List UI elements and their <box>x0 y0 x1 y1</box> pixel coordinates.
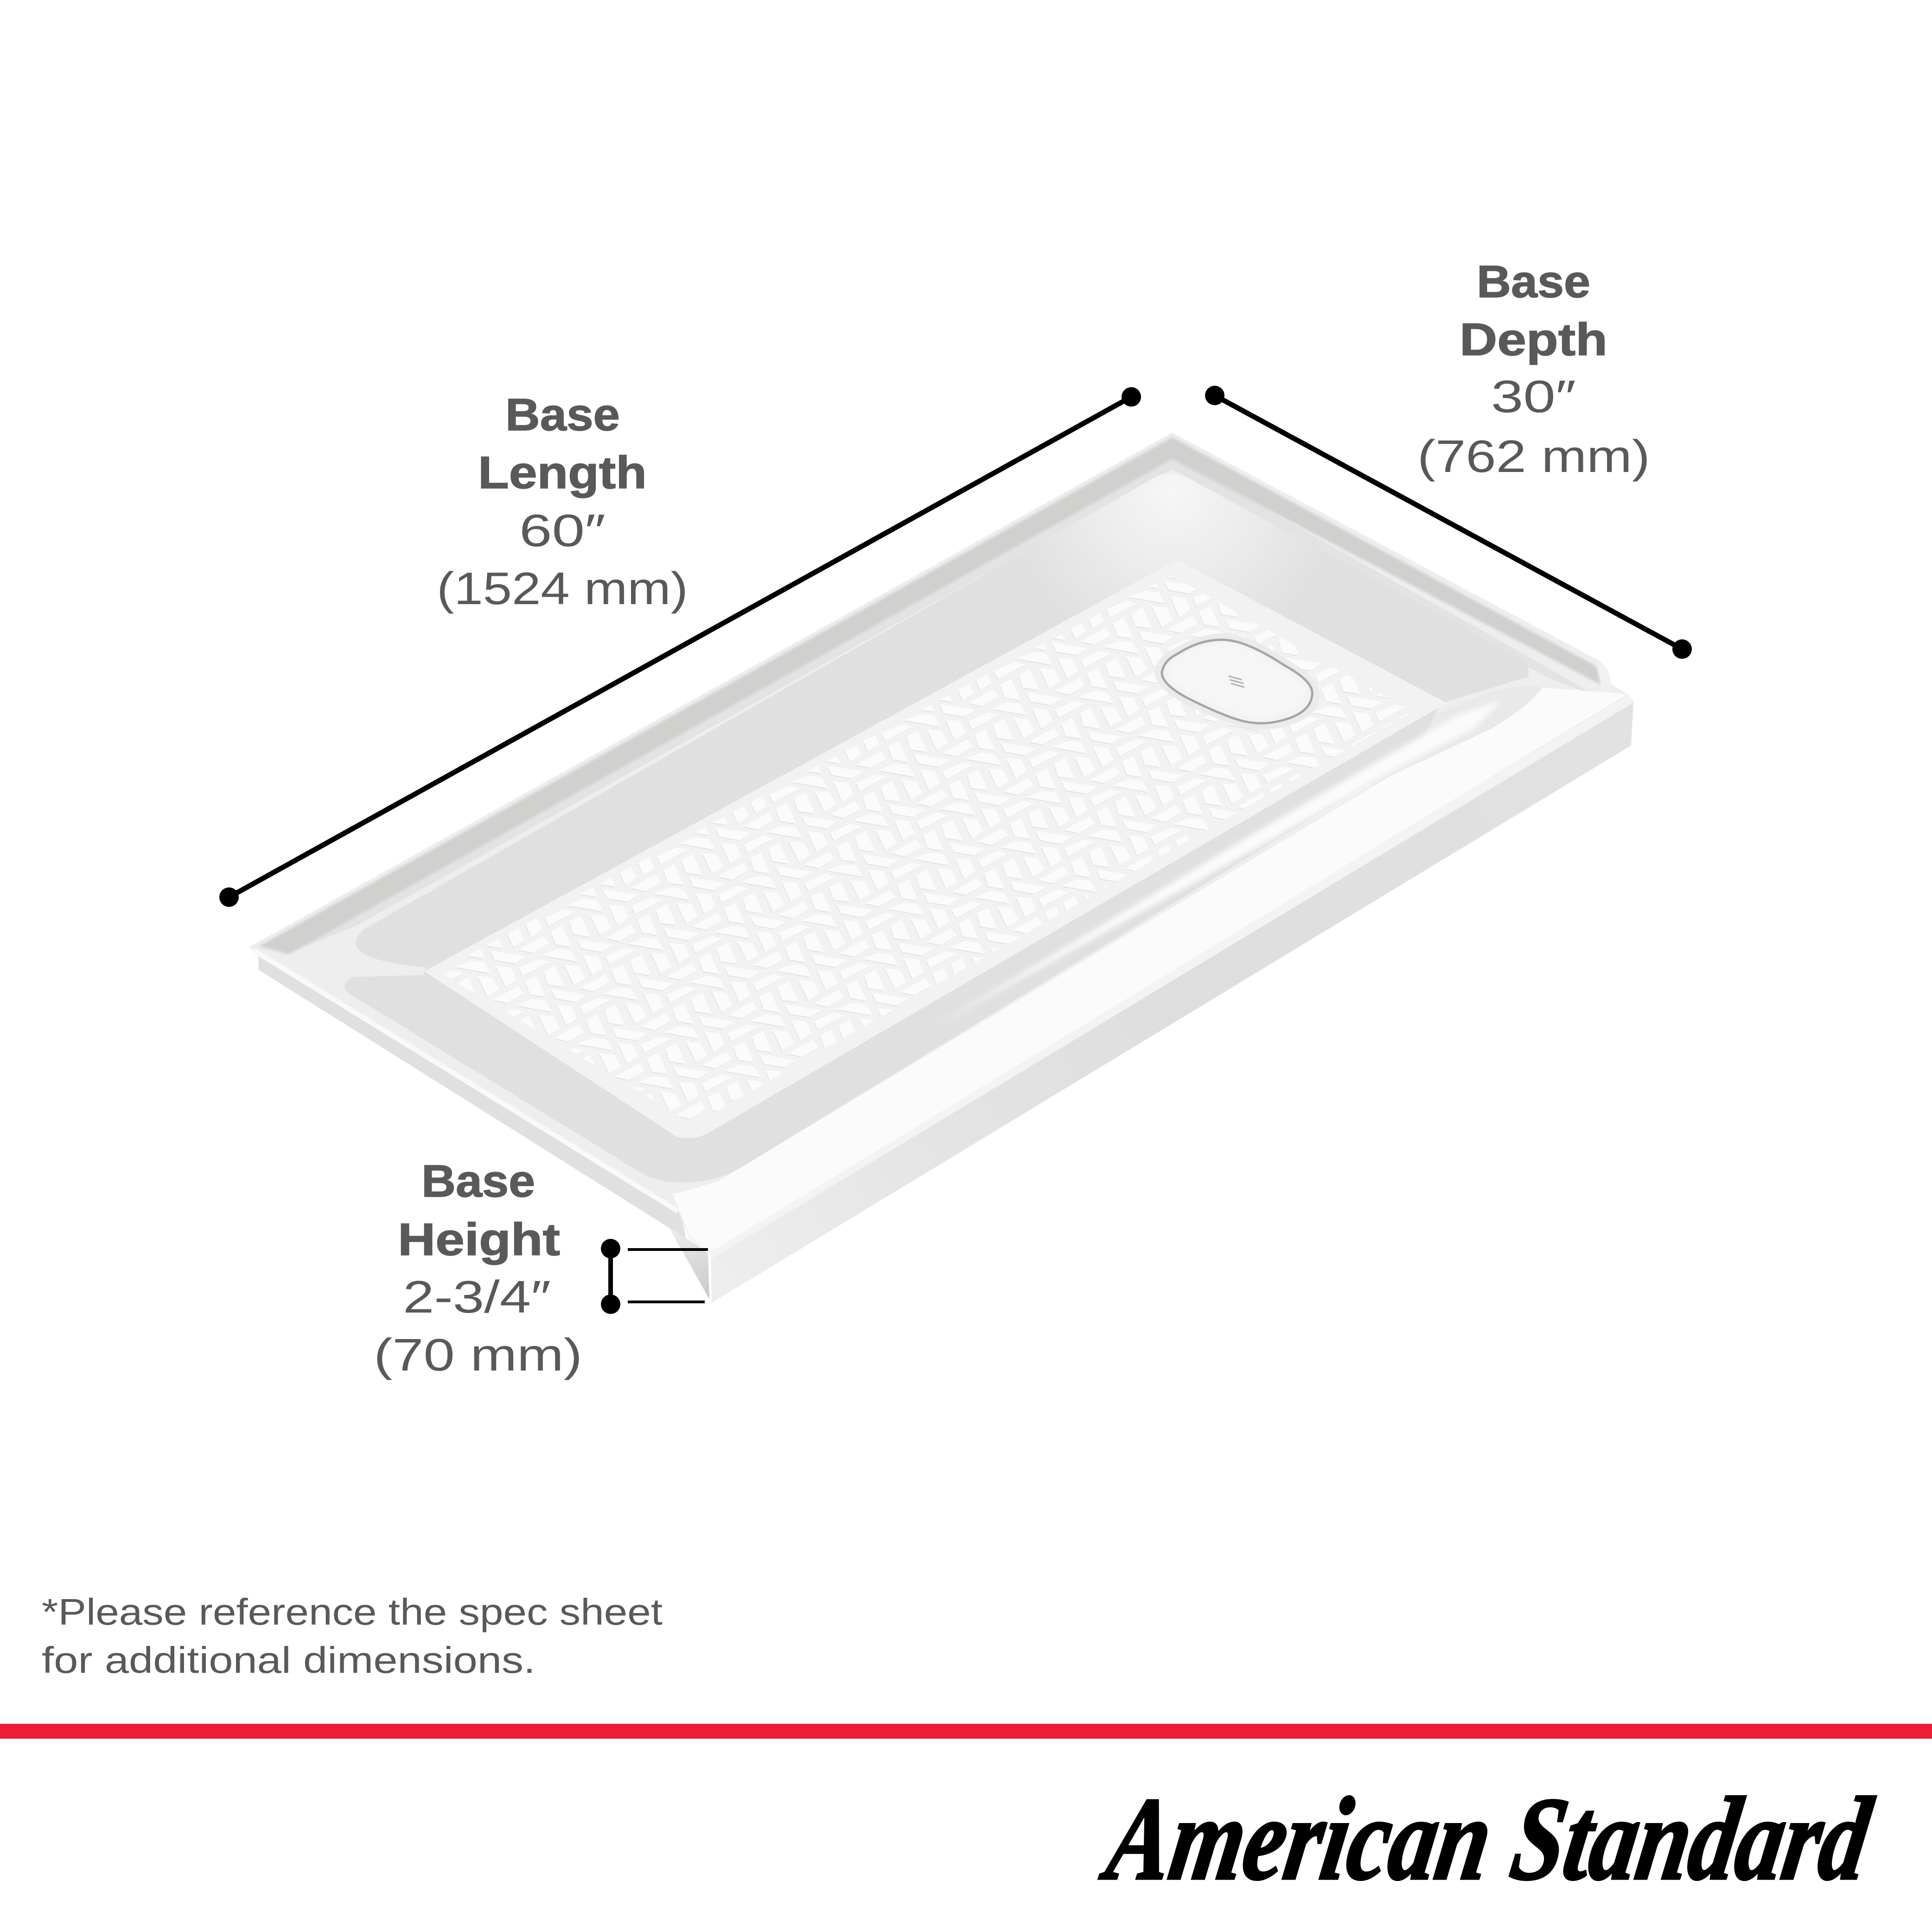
threshold top <box>672 688 1627 1252</box>
label: base depth: Depth <box>1460 314 1607 365</box>
front edge lip <box>711 695 1633 1259</box>
label: base height: Height <box>398 1214 560 1265</box>
rim dark band <box>259 437 1601 954</box>
drain cover <box>1154 633 1320 729</box>
label: base depth: Base <box>1477 256 1590 307</box>
left rim highlight <box>254 950 678 1211</box>
label: base height: 2-3/4″ <box>403 1271 551 1322</box>
dimension line: base height <box>601 1239 708 1314</box>
label: base length: (1524 mm) <box>437 563 688 614</box>
tray front face <box>711 701 1633 1303</box>
basin floor recess <box>344 473 1529 1182</box>
threshold hump <box>1372 686 1543 787</box>
drain lid rim <box>1162 640 1312 723</box>
tray left skirt <box>249 947 686 1238</box>
dimension line: base length <box>219 387 1141 907</box>
dimension line: base depth <box>1205 386 1692 659</box>
label: base length: Length <box>478 447 647 498</box>
mat surface <box>424 561 1447 1138</box>
tray front wedge <box>669 1228 709 1299</box>
back rim channel <box>259 437 1612 957</box>
footnote: for additional dimensions. <box>42 1639 536 1681</box>
label: base length: Base <box>505 389 620 440</box>
red divider bar <box>0 1724 1932 1739</box>
label: base depth: (762 mm) <box>1417 431 1650 482</box>
threshold streak <box>931 700 1502 1029</box>
tray top surface <box>249 433 1633 1255</box>
shower base tray <box>249 433 1633 1303</box>
rim lighter inner band <box>278 457 1598 957</box>
footnote <box>42 1591 663 1681</box>
label: base length: 60″ <box>519 505 606 556</box>
drain logo <box>1229 676 1244 687</box>
textured floor mat <box>417 556 1447 1141</box>
label: base height: (70 mm) <box>374 1329 582 1380</box>
mat tile pattern <box>444 575 1411 1121</box>
rim end nub <box>1596 662 1612 698</box>
label: base depth: 30″ <box>1491 371 1576 422</box>
label: base depth <box>1417 256 1650 482</box>
label: base height <box>374 1155 582 1380</box>
label: base height: Base <box>421 1155 535 1206</box>
drain halo <box>1154 633 1320 729</box>
basin corner highlight <box>1071 473 1275 588</box>
label: base length <box>437 389 688 614</box>
footnote: *Please reference the spec sheet <box>42 1591 663 1632</box>
drain lid face <box>1168 644 1306 717</box>
